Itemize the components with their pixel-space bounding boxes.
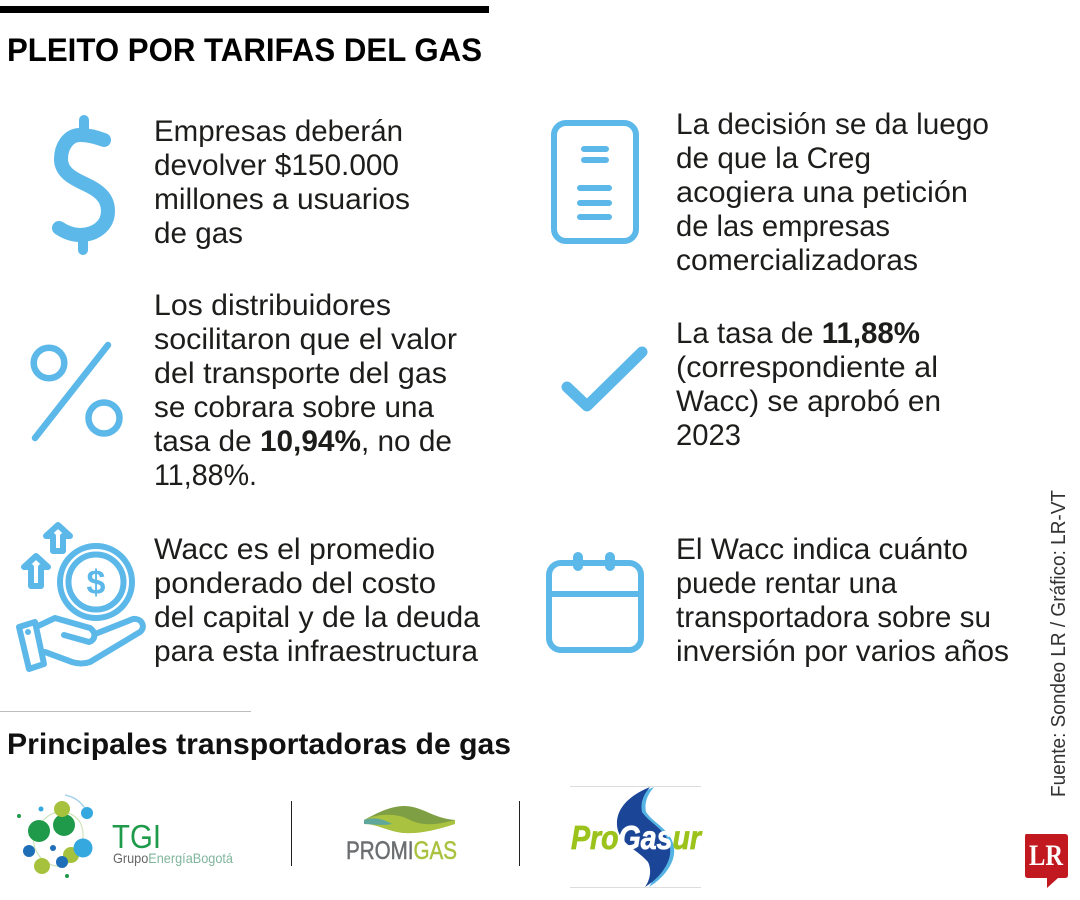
text: wacc indica: El Wacc indica cuánto bbox=[676, 533, 968, 566]
text: la tasa: La tasa de 11,88% bbox=[676, 317, 920, 350]
text: la decisión bbox=[676, 108, 989, 277]
text: wacc indica: puede rentar una bbox=[676, 567, 897, 600]
logo: TGI: GrupoEnergíaBogotá bbox=[113, 850, 233, 866]
icon: hand holding coin with arrows: $ bbox=[87, 564, 106, 602]
logo: TGI bbox=[17, 795, 233, 878]
subheading: Principales transportadoras de gas bbox=[7, 728, 511, 761]
logo: LR bbox=[1025, 834, 1068, 888]
text: wacc promedio: para esta infraestructura bbox=[154, 635, 478, 668]
text: wacc promedio: Wacc es el promedio bbox=[154, 533, 435, 566]
text: los distribuidores: del transporte del gas bbox=[154, 357, 447, 390]
logo: TGI: TGI bbox=[112, 818, 161, 855]
text: los distribuidores: tasa de 10,94%, no de bbox=[154, 425, 452, 458]
text: wacc promedio: ponderado del costo bbox=[154, 567, 436, 600]
text: los distribuidores bbox=[154, 289, 457, 492]
title: PLEITO POR TARIFAS DEL GAS bbox=[7, 32, 482, 68]
icon: check mark bbox=[567, 352, 642, 406]
text: la decisión: de que la Creg bbox=[676, 142, 871, 175]
icon: percent bbox=[34, 345, 120, 438]
text: la decisión: comercializadoras bbox=[676, 244, 918, 277]
text: la tasa bbox=[676, 317, 941, 452]
text: los distribuidores: 11,88%. bbox=[154, 459, 257, 492]
text: la decisión: acogiera una petición bbox=[676, 176, 968, 209]
text: wacc indica: inversión por varios años bbox=[676, 635, 1009, 668]
icon: document bbox=[554, 123, 636, 241]
text: los distribuidores: socilitaron que el valor bbox=[154, 323, 457, 356]
text: wacc promedio: del capital y de la deuda bbox=[154, 601, 480, 634]
logo: ProGasur: ProGasur bbox=[571, 819, 703, 856]
text: empresas deberán devolver: de gas bbox=[154, 217, 243, 250]
text: empresas deberán devolver: Empresas deberán bbox=[154, 115, 403, 148]
text: la tasa: Wacc) se aprobó en bbox=[676, 385, 941, 418]
text: la decisión: La decisión se da luego bbox=[676, 108, 989, 141]
icon: hand holding coin with arrows bbox=[19, 525, 143, 669]
icon: calendar bbox=[549, 552, 641, 650]
text: la decisión: de las empresas bbox=[676, 210, 890, 243]
top bar bbox=[0, 6, 489, 13]
text: wacc indica bbox=[676, 533, 1009, 668]
text: los distribuidores: Los distribuidores bbox=[154, 289, 391, 322]
text: empresas deberán devolver: millones a usuarios bbox=[154, 183, 410, 216]
logo: LR: LR bbox=[1029, 839, 1063, 872]
text: wacc promedio bbox=[154, 533, 480, 668]
logo: ProGasur bbox=[570, 786, 703, 888]
logo: Promigas: PROMIGAS bbox=[346, 837, 457, 865]
text: empresas deberán devolver: devolver $150.000 bbox=[154, 149, 399, 182]
text: la tasa: (correspondiente al bbox=[676, 351, 938, 384]
text: los distribuidores: se cobrara sobre una bbox=[154, 391, 434, 424]
text: wacc indica: transportadora sobre su bbox=[676, 601, 991, 634]
source note: Fuente: Sondeo LR / Gráfico: LR-VT bbox=[1048, 490, 1070, 797]
text: empresas deberán devolver bbox=[154, 115, 410, 250]
icon: dollar sign bbox=[59, 120, 108, 250]
text: la tasa: 2023 bbox=[676, 419, 741, 452]
logo: Promigas bbox=[346, 806, 457, 865]
